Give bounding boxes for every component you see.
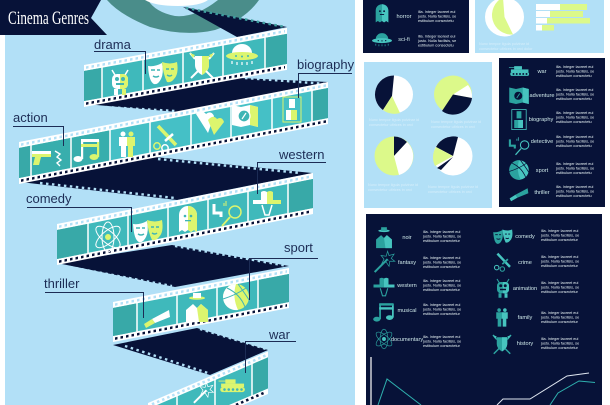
- icon: noir: [376, 227, 392, 248]
- bar chart: [536, 4, 590, 30]
- row: documentary: documentary: [391, 337, 423, 343]
- pie chart: [485, 0, 524, 36]
- row: musical: musical: [398, 308, 416, 314]
- icon: family: [119, 132, 135, 157]
- row: war: war: [536, 69, 547, 75]
- row: musical: [398, 303, 461, 316]
- row: animation: illa. Integer laoreet eui: [541, 281, 579, 285]
- label: action: action: [13, 110, 48, 125]
- icon: crime: [494, 254, 510, 271]
- film reel arc: [107, 0, 259, 33]
- icon: robot: [497, 279, 509, 298]
- icon: ufo: [372, 33, 392, 46]
- row: musical: illa. Integer laoreet eui: [423, 303, 461, 307]
- row: sci-fi: justo. Nulla facilisis, se: [417, 39, 456, 43]
- row: crime: illa. Integer laoreet eui: [541, 255, 579, 259]
- row: history: [517, 337, 579, 350]
- film strip: drama row: [84, 28, 287, 107]
- row: detective: [531, 135, 594, 148]
- label: comedy: comedy: [26, 191, 72, 206]
- icon: western hat: [374, 278, 394, 296]
- line chart: [371, 357, 595, 405]
- pie 3 caption: Nunc tempor ligula pulvinar id: [368, 183, 418, 187]
- row: western: [396, 279, 461, 292]
- row: family: illa. Integer laoreet eui: [541, 311, 579, 315]
- row: comedy: illa. Integer laoreet eui: [541, 229, 579, 233]
- label: sport: [250, 240, 318, 300]
- icon: shield: [493, 335, 511, 354]
- caption: Nunc tempor ligula pulvinar id: [479, 42, 529, 46]
- row: crime: justo. Nulla facilisis, se: [540, 260, 579, 264]
- row: sci-fi: estibulum consectetu: [418, 44, 454, 48]
- pie 3: [374, 136, 414, 176]
- row: crime: crime: [518, 260, 532, 266]
- icon: wand: [374, 251, 395, 273]
- pie 4: [433, 136, 472, 176]
- row: biography: justo. Nulla facilisis, se: [555, 116, 594, 120]
- pie 2 caption: Nunc tempor ligula pulvinar id: [431, 120, 481, 124]
- row: western: illa. Integer laoreet eui: [423, 279, 461, 283]
- row: sport: estibulum consectetu: [556, 171, 592, 175]
- row: thriller: thriller: [534, 190, 550, 196]
- row: horror: horror: [397, 14, 412, 20]
- label: action: [13, 110, 64, 146]
- row: adventure: adventure: [530, 93, 554, 99]
- icon: ball: [223, 284, 249, 310]
- film back: thriller to war: [113, 328, 268, 375]
- row: detective: detective: [531, 139, 553, 145]
- icon: atom: [374, 329, 394, 349]
- row: sport: sport: [536, 168, 549, 174]
- row: biography: illa. Integer laoreet eui: [556, 111, 594, 115]
- icon: magic wand: [193, 382, 214, 404]
- panel: genre list and line chart: [366, 214, 602, 405]
- icon: ufo: [226, 44, 258, 65]
- row: family: family: [518, 315, 533, 321]
- panel: war to thriller list: [499, 58, 605, 207]
- label: thriller: [44, 276, 144, 318]
- row: adventure: [530, 88, 594, 101]
- label: drama: drama: [94, 37, 132, 52]
- row: documentary: illa. Integer laoreet eui: [423, 335, 461, 339]
- icon: comedy masks: [133, 220, 163, 242]
- row: noir: estibulum consectetur: [423, 239, 461, 243]
- row: war: justo. Nulla facilisis, se: [555, 70, 594, 74]
- label: war: [246, 327, 296, 373]
- icon: gun: [32, 151, 61, 166]
- film reel hub: [145, 0, 208, 6]
- row: comedy: comedy: [515, 234, 535, 240]
- icon: knife: [510, 188, 528, 201]
- pie 1 caption: consectetur ultrices in orci: [369, 123, 413, 127]
- icon: biography: [512, 110, 526, 130]
- row: noir: [402, 230, 461, 243]
- row: sci-fi: sci-fi: [398, 37, 410, 43]
- icon: tank: [509, 66, 529, 76]
- film back: action to western: [20, 157, 312, 200]
- pie 4 caption: Nunc tempor ligula pulvinar id: [428, 185, 478, 189]
- row: adventure: justo. Nulla facilisis, se: [555, 92, 594, 96]
- title banner: [0, 0, 107, 35]
- row: noir: illa. Integer laoreet eui: [423, 230, 461, 234]
- label: comedy: [26, 191, 132, 232]
- row: fantasy: fantasy: [398, 260, 416, 266]
- row: fantasy: [398, 256, 461, 269]
- row: war: illa. Integer laoreet eui: [556, 65, 594, 69]
- row: horror: illa. Integer laoreet eui: [418, 10, 456, 14]
- row: documentary: [391, 335, 461, 348]
- strip icons: [32, 44, 301, 404]
- row: documentary: estibulum consectetur: [423, 344, 461, 348]
- row: comedy: justo. Nulla facilisis, se: [540, 234, 579, 238]
- row: biography: biography: [529, 117, 553, 123]
- pie 1: [375, 76, 413, 114]
- row: thriller: estibulum consectetu: [556, 194, 592, 198]
- row: horror: [397, 10, 456, 23]
- panel: four pie charts: [364, 62, 492, 208]
- icon: family: [496, 308, 508, 327]
- row: war: estibulum consectetu: [556, 74, 592, 78]
- row: animation: justo. Nulla facilisis, se: [540, 286, 579, 290]
- row: western: estibulum consectetur: [423, 288, 461, 292]
- label: western: [258, 147, 326, 194]
- icon: robot: [112, 70, 128, 95]
- row: history: justo. Nulla facilisis, se: [540, 342, 579, 346]
- row: history: illa. Integer laoreet eui: [541, 337, 579, 341]
- row: biography: estibulum consectetu: [556, 120, 592, 124]
- row: adventure: estibulum consectetu: [556, 97, 592, 101]
- row: war: [536, 65, 594, 78]
- icon: hearts: [196, 112, 224, 135]
- film back: drama to biography: [85, 78, 328, 112]
- icon: detective: [510, 137, 529, 155]
- left background panel: [5, 0, 355, 405]
- icon: drama masks: [148, 62, 178, 84]
- row: comedy: [515, 229, 579, 242]
- icon: ghost: [179, 206, 197, 232]
- row: musical: estibulum consectetur: [423, 312, 461, 316]
- icon: noir figure: [186, 293, 208, 322]
- pie 2 caption: consectetur ultrices in orci: [431, 125, 475, 129]
- row: detective: illa. Integer laoreet eui: [556, 135, 594, 139]
- label: biography: biography: [297, 57, 355, 72]
- row: sci-fi: [398, 34, 456, 48]
- row: horror: estibulum consectetu: [418, 19, 454, 23]
- pie 4 caption: consectetur ultrices in orci: [428, 190, 472, 194]
- row: fantasy: justo. Nulla facilisis, se: [422, 260, 461, 264]
- row: animation: estibulum consectetur: [541, 290, 579, 294]
- film back: top segment: [183, 7, 287, 37]
- pie 3 caption: [368, 183, 418, 192]
- icon: biography: [283, 97, 301, 122]
- row: noir: noir: [402, 235, 412, 241]
- row: family: [518, 311, 579, 324]
- icon: atom: [93, 222, 123, 252]
- pie 1 caption: Nunc tempor ligula pulvinar id: [369, 118, 419, 122]
- film strip: action row: [19, 82, 328, 184]
- pie 1 caption: [369, 118, 419, 127]
- icon: shield: [190, 53, 214, 78]
- label: western: western: [278, 147, 325, 162]
- pie 3 caption: consectetur ultrices in orci: [368, 188, 412, 192]
- panel: pie and bars: [475, 0, 604, 53]
- row: family: estibulum consectetur: [541, 320, 579, 324]
- icon: map: [509, 88, 529, 104]
- film back: comedy to sport: [57, 245, 289, 287]
- row: biography: [529, 111, 594, 124]
- row: crime: [518, 255, 579, 268]
- icon: detective: [214, 201, 241, 226]
- row: sci-fi: illa. Integer laoreet eui: [418, 34, 456, 38]
- row: western: justo. Nulla facilisis, se: [422, 284, 461, 288]
- row: crime: estibulum consectetur: [541, 264, 579, 268]
- row: adventure: illa. Integer laoreet eui: [556, 88, 594, 92]
- film strip: comedy row: [57, 173, 313, 265]
- row: horror: justo. Nulla facilisis, se: [417, 14, 456, 18]
- row: sport: illa. Integer laoreet eui: [556, 162, 594, 166]
- row: sport: justo. Nulla facilisis, se: [555, 166, 594, 170]
- icon: tank: [219, 379, 245, 392]
- label: drama: [94, 37, 146, 74]
- icon: ball: [509, 160, 529, 180]
- icon: music notes: [74, 139, 99, 162]
- row: history: history: [517, 341, 533, 347]
- icon: handcuffs: [154, 126, 176, 151]
- icon: ghost: [376, 4, 388, 22]
- row: thriller: justo. Nulla facilisis, se: [555, 190, 594, 194]
- film strip: thriller row: [113, 268, 289, 342]
- film strip: war row: [148, 351, 268, 405]
- row: fantasy: illa. Integer laoreet eui: [423, 256, 461, 260]
- row: sport: [536, 162, 594, 175]
- label: war: war: [268, 327, 291, 342]
- icon: western hat: [253, 191, 281, 215]
- row: detective: justo. Nulla facilisis, se: [555, 140, 594, 144]
- row: western: western: [396, 283, 417, 289]
- label: thriller: thriller: [44, 276, 80, 291]
- icon: knife: [144, 310, 170, 328]
- row: thriller: [534, 185, 594, 198]
- row: documentary: justo. Nulla facilisis, se: [422, 340, 461, 344]
- row: comedy: estibulum consectetur: [541, 238, 579, 242]
- pie 2 caption: [431, 120, 481, 129]
- caption: [479, 42, 533, 51]
- icon: map: [232, 105, 258, 127]
- row: thriller: illa. Integer laoreet eui: [556, 185, 594, 189]
- icon: comedy masks: [493, 230, 512, 244]
- row: animation: animation: [513, 286, 537, 292]
- pie 4 caption: [428, 185, 478, 194]
- label: biography: [297, 57, 355, 98]
- row: family: justo. Nulla facilisis, se: [540, 316, 579, 320]
- panel: horror and sci-fi: [363, 0, 469, 53]
- row: noir: justo. Nulla facilisis, se: [422, 234, 461, 238]
- icon: notes: [373, 303, 394, 322]
- row: animation: [513, 281, 579, 294]
- row: detective: estibulum consectetu: [556, 144, 592, 148]
- label: sport: sport: [284, 240, 313, 255]
- title banner: Cinema Genres: [8, 8, 89, 29]
- row: history: estibulum consectetur: [541, 346, 579, 350]
- row: fantasy: estibulum consectetur: [423, 265, 461, 269]
- caption: consectetur ultrices in orci dolor: [479, 47, 533, 51]
- row: musical: justo. Nulla facilisis, se: [422, 308, 461, 312]
- pie 2: [434, 76, 472, 115]
